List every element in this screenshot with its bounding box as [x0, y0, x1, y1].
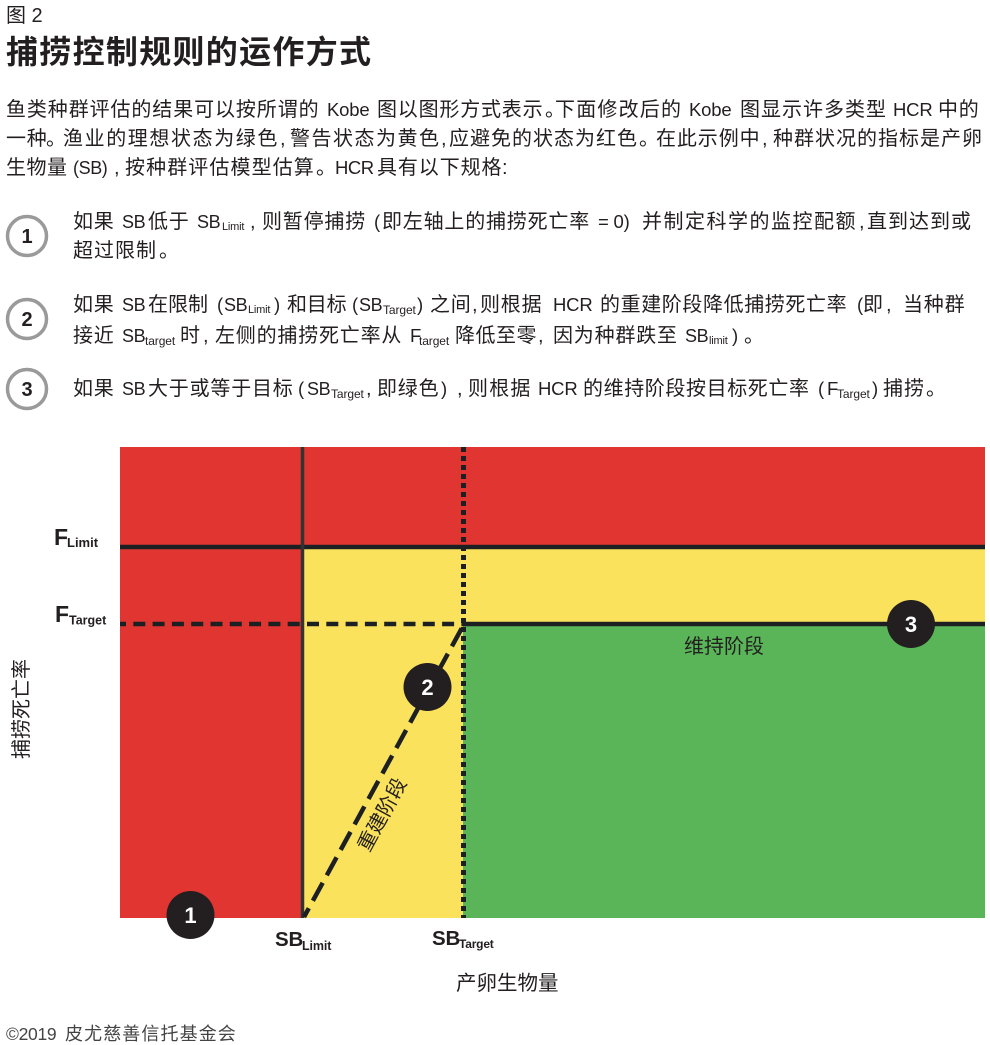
rule 2 text	[73, 294, 965, 348]
rule 2 text: 的重建阶段降低捕捞死亡率	[600, 294, 847, 316]
rule 3 number badge	[6, 368, 48, 410]
rule 2 text: 降低至零	[455, 325, 537, 347]
rule 2 text: SB	[122, 295, 145, 315]
rule 2 text: (	[217, 294, 223, 315]
SB target dotted line	[461, 447, 466, 918]
rule 2 text: 则根据	[480, 294, 542, 316]
rule 2 text: HCR	[553, 294, 592, 315]
intro text block: 图显示许多类型	[740, 99, 887, 121]
rule 2 text: 时	[180, 325, 201, 347]
SB limit label: Limit	[302, 939, 332, 953]
intro text block: HCR	[335, 157, 374, 178]
rule 1 text: SB	[197, 212, 220, 232]
rule 3	[6, 368, 947, 410]
rule 3 text: SB	[307, 379, 330, 399]
intro text block: 。	[545, 99, 566, 121]
rule 2 text: (	[857, 294, 863, 315]
rule 1 text: 并制定科学的监控配额	[642, 211, 857, 233]
intro text block: 下面修改后的	[555, 99, 682, 121]
rule 1 text: 即左轴上的捕捞死亡率	[382, 211, 590, 233]
rule 2 text: 在限制	[148, 294, 208, 316]
SB target label: Target	[459, 937, 494, 951]
rule 1 text	[73, 210, 972, 262]
rule 2 text: 当种群	[903, 294, 965, 316]
intro text block: ,	[441, 128, 447, 150]
rule 3 text: 则根据	[468, 378, 532, 400]
rule 3 text: ,	[366, 378, 372, 400]
rule 3 text: 捕捞	[883, 378, 925, 400]
intro text block: 按种群评估模型估算	[125, 157, 315, 179]
intro text block: Kobe	[327, 99, 369, 120]
rule 2 text: SB	[359, 295, 382, 315]
intro text block: Kobe	[689, 99, 731, 120]
rule 1 text: = 0)	[598, 211, 630, 232]
intro text block: 。	[316, 157, 337, 179]
rule 2 number badge	[6, 298, 48, 340]
rule 3 text: )	[872, 378, 878, 399]
marker 3	[887, 600, 935, 648]
rule 2 text: 和目标	[287, 294, 346, 316]
rule 1 text: 低于	[148, 211, 190, 233]
rule 2 text: 即	[863, 294, 884, 316]
rule 2 text: ,	[472, 294, 478, 316]
marker 1: 1	[184, 903, 197, 928]
rule 3 text: 即绿色	[377, 378, 439, 400]
marker 3: 3	[905, 612, 917, 637]
intro text block: 图以图形方式表示	[377, 99, 543, 121]
rule 1 text: 则暂停捕捞	[262, 211, 366, 233]
maintenance phase label: 维持阶段	[684, 635, 764, 658]
rule 2 text: 。	[744, 325, 765, 347]
rule 3 text: F	[827, 378, 838, 399]
rule 2 text: target	[145, 334, 175, 348]
rule 3 text: (	[298, 378, 304, 399]
F target dashed line	[120, 622, 463, 626]
rule 3 number badge: 3	[21, 379, 33, 401]
rule 2 text: ,	[886, 294, 892, 316]
rule 2 text: 之间	[430, 294, 472, 316]
rule 2 text: SB	[224, 295, 247, 315]
rule 2 text: 接近	[73, 325, 115, 347]
rule 2 text: (	[352, 294, 358, 315]
rule 3 text: Target	[837, 387, 870, 401]
rule 1 text: SB	[122, 212, 145, 232]
rule 3 text: SB	[122, 379, 145, 399]
rule 2 text: ,	[538, 325, 544, 347]
y axis title: 捕捞死亡率	[10, 659, 33, 759]
intro text block: 生物量	[6, 157, 68, 179]
rule 2	[6, 294, 965, 348]
rule 2 text: F	[410, 325, 421, 346]
SB limit label: SB	[275, 928, 303, 951]
title: 捕捞控制规则的运作方式	[6, 34, 372, 70]
intro text block: 具有以下规格	[377, 157, 502, 179]
intro text block: HCR	[893, 99, 932, 120]
rule 2 text: )	[417, 294, 423, 315]
SB limit line	[301, 447, 304, 918]
rule 1 text: Limit	[222, 221, 244, 233]
rule 3 text: 如果	[73, 378, 115, 400]
intro text block: 应避免的状态为红色	[449, 128, 638, 150]
intro text block: 种群状况的指标是产卵	[773, 128, 983, 150]
rule 2 text: ,	[203, 325, 209, 347]
rule 1 text: 超过限制	[73, 240, 157, 262]
rule 2 text: Target	[383, 303, 416, 317]
rule 3 text: (	[818, 378, 824, 399]
intro text block: 一种	[6, 128, 48, 150]
intro text block: 渔业的理想状态为绿色	[63, 128, 279, 150]
copyright: 皮尤慈善信托基金会	[65, 1024, 237, 1044]
SB target label: SB	[432, 927, 460, 950]
rule 2 number badge: 2	[21, 309, 33, 331]
F limit line	[120, 545, 985, 549]
rule 3 text	[73, 378, 947, 401]
rule 2 text: limit	[709, 335, 728, 347]
rule 3 text: 的维持阶段按目标死亡率	[583, 378, 810, 400]
intro text block	[6, 99, 983, 179]
red zone	[120, 447, 985, 918]
rule 1 text: (	[374, 211, 380, 232]
intro text block: ,	[114, 157, 120, 179]
marker 2: 2	[421, 675, 434, 700]
F target label: Target	[69, 614, 107, 628]
x axis title: 产卵生物量	[456, 972, 558, 995]
rule 1 text: 如果	[73, 211, 115, 233]
rule 1 number badge	[6, 214, 48, 258]
rule 3 text: 。	[926, 378, 947, 400]
intro text block: 。	[639, 128, 660, 150]
rule 1 text: ,	[859, 211, 865, 233]
intro text block: 中的	[938, 99, 980, 121]
intro text block: 鱼类种群评估的结果可以按所谓的	[6, 99, 320, 121]
intro text block: (SB)	[73, 158, 107, 178]
F limit label: F	[54, 524, 68, 550]
rule 3 text: Target	[331, 387, 364, 401]
rule 2 text: target	[419, 334, 449, 348]
rule 2 text: 左侧的捕捞死亡率从	[215, 325, 402, 347]
rule 1	[6, 210, 972, 262]
rule 2 text: SB	[122, 326, 145, 346]
rule 3 text: HCR	[538, 378, 577, 399]
marker 1	[166, 891, 214, 939]
rule 2 text: 如果	[73, 294, 115, 316]
intro text block: ,	[280, 128, 286, 150]
copyright: ©2019	[6, 1024, 56, 1044]
intro text block: 警告状态为黄色	[290, 128, 440, 150]
marker 2	[404, 663, 452, 711]
rule 1 number badge: 1	[21, 226, 33, 248]
rule 2 text: )	[274, 294, 280, 315]
rule 2 text: )	[732, 325, 738, 346]
rebuilding phase label: 重建阶段	[353, 774, 412, 855]
yellow zone	[302, 547, 985, 918]
F limit label: Limit	[67, 535, 99, 550]
rule 2 text: Limit	[248, 304, 270, 316]
green zone	[463, 624, 985, 918]
rebuilding dashed line	[304, 626, 463, 917]
rule 3 text: ,	[457, 378, 463, 400]
intro text block: :	[502, 157, 508, 179]
rule 1 text: 直到达到或	[867, 211, 972, 233]
rule 2 text: SB	[685, 326, 708, 346]
figure number: 图 2	[6, 5, 43, 27]
F target solid line	[463, 622, 985, 626]
intro text block: 。	[46, 128, 67, 150]
rule 2 text: 因为种群跌至	[553, 325, 678, 347]
rule 3 text: 大于或等于目标	[148, 378, 294, 400]
rule 1 text: 。	[159, 240, 180, 262]
rule 1 text: ,	[250, 211, 256, 233]
rule 3 text: )	[441, 378, 447, 399]
intro text block: ,	[762, 128, 768, 150]
intro text block: 在此示例中	[656, 128, 760, 150]
F target label: F	[55, 601, 69, 627]
